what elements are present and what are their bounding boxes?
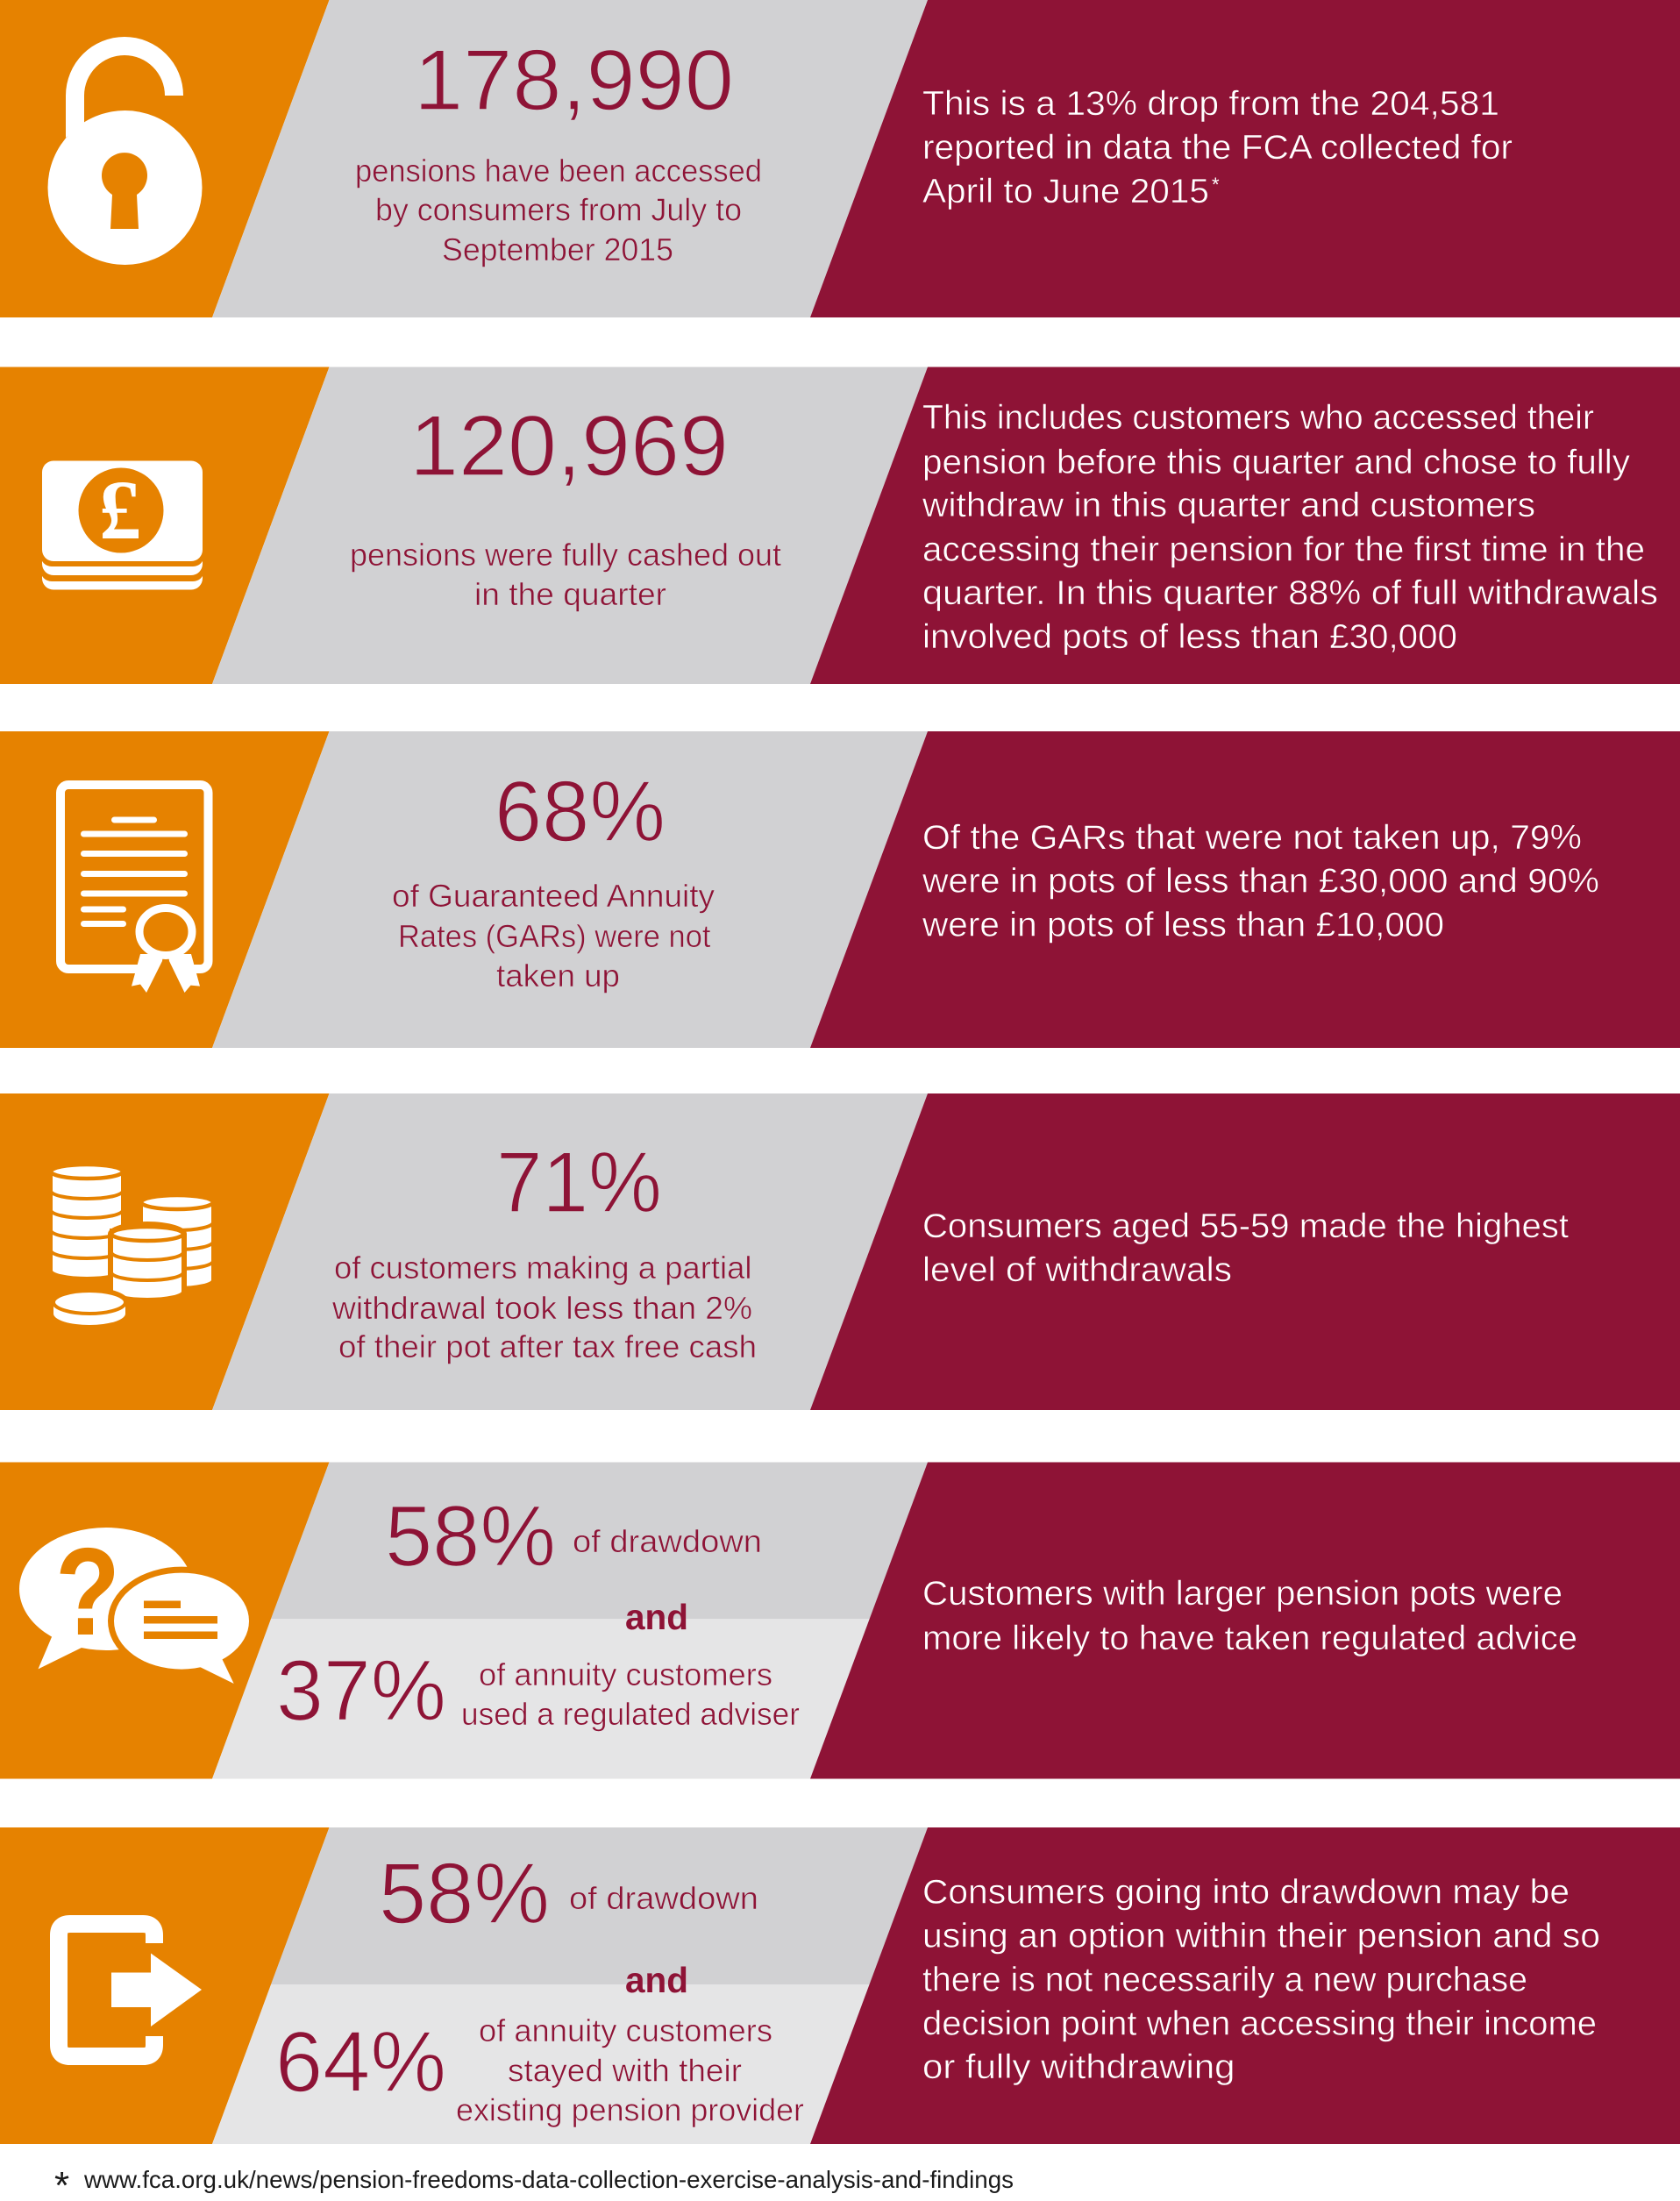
note text: April to June 2015 [922,173,1209,210]
maroon note panel [810,1827,1680,2144]
row 5: regulated advice [0,1463,1680,1778]
note text: were in pots of less than £30,000 and 90% [922,863,1599,900]
note text: This includes customers who accessed their [922,399,1594,437]
maroon note panel [810,1093,1680,1410]
note text: Customers with larger pension pots were [922,1575,1563,1613]
note text: This is a 13% drop from the 204,581 [922,85,1499,123]
maroon note panel [810,1463,1680,1778]
icon: certificate with rosette [61,785,209,993]
row 4: partial withdrawals [0,1093,1680,1410]
stat description: pensions were fully cashed out [350,537,781,573]
big number 64%: 64% [275,2013,446,2110]
note text: quarter. In this quarter 88% of full withdrawals [922,574,1658,612]
orange icon panel [0,1463,330,1778]
orange icon panel [0,1093,330,1410]
maroon note panel [810,0,1680,317]
note text: Of the GARs that were not taken up, 79% [922,819,1582,857]
stat description: of Guaranteed Annuity [392,878,715,914]
maroon note panel [810,367,1680,684]
stat description: by consumers from July to [375,191,742,228]
stat description: stayed with their [508,2052,742,2089]
upper grey stat panel [271,1463,928,1619]
note text: more likely to have taken regulated advice [922,1620,1577,1657]
big number 120,969: 120,969 [409,397,729,494]
stat description: of annuity customers [479,2012,772,2048]
stat description [355,153,762,267]
stat description: September 2015 [442,231,673,267]
row 3: guaranteed annuity rates [0,731,1680,1048]
stat description: existing pension provider [456,2092,804,2127]
stat description: Rates (GARs) were not [398,918,710,954]
note text [922,85,1513,210]
icon: open padlock [47,37,202,265]
icon: stack of pound notes [40,461,204,589]
row 1: pensions accessed [0,0,1680,317]
row 6: staying with provider [0,1827,1680,2144]
label: and: and [625,1597,688,1637]
label: of drawdown: of drawdown [569,1880,758,1916]
note text: * [1212,174,1220,196]
icon: exit door arrow [59,1924,202,2056]
stat description: of their pot after tax free cash [338,1328,757,1364]
icon: stacks of coins [49,1165,213,1325]
note text [922,1207,1569,1289]
note text: accessing their pension for the first time in the [922,531,1645,568]
stat description: of annuity customers [479,1656,772,1692]
stat description: used a regulated adviser [461,1696,800,1732]
note text: decision point when accessing their income [922,2005,1597,2043]
stat description: taken up [496,958,620,994]
note text: level of withdrawals [922,1251,1232,1289]
stat description: of customers making a partial [334,1250,752,1286]
note text: involved pots of less than £30,000 [922,618,1457,656]
note text: Consumers going into drawdown may be [922,1873,1570,1912]
upper grey stat panel [271,1827,928,1984]
label: and: and [625,1960,688,2000]
big number 178,990: 178,990 [414,32,734,128]
stat description [456,2012,804,2127]
stat description: withdrawal took less than 2% [331,1290,752,1326]
stat description: pensions have been accessed [355,153,762,189]
note text: using an option within their pension and so [922,1917,1600,1955]
stat description [350,537,781,612]
grey stat panel [212,0,928,317]
note text: pension before this quarter and chose to fully [922,444,1631,481]
stat description: in the quarter [474,576,666,612]
note text [922,819,1599,944]
grey stat panel [212,1093,928,1410]
maroon note panel [810,731,1680,1048]
orange icon panel [0,731,330,1048]
note text: Consumers aged 55-59 made the highest [922,1207,1569,1245]
grey stat panel [212,731,928,1048]
lower light stat panel [212,1619,870,1778]
big number 71%: 71% [496,1134,662,1230]
big number 37%: 37% [276,1642,446,1739]
big number 68%: 68% [495,763,666,859]
orange icon panel [0,0,330,317]
footnote source link: www.fca.org.uk/news/pension-freedoms-data-collection-exercise-analysis-and-findings [83,2166,1014,2193]
icon: chat speech bubbles: ? [55,1522,120,1662]
lower light stat panel [212,1984,870,2144]
note text: reported in data the FCA collected for [922,129,1513,167]
note text [922,1575,1577,1657]
note text: there is not necessarily a new purchase [922,1961,1527,1999]
note text [922,399,1658,656]
note text: were in pots of less than £10,000 [922,907,1444,944]
big number 58%: 58% [385,1487,556,1584]
orange icon panel [0,1827,330,2144]
note text [922,1873,1600,2086]
note text: or fully withdrawing [922,2048,1235,2086]
icon: chat speech bubbles [19,1522,255,1684]
label: of drawdown: of drawdown [573,1523,762,1559]
icon: stack of pound notes: £ [99,463,141,557]
stat description [392,878,715,994]
note text: withdraw in this quarter and customers [922,487,1535,524]
orange icon panel [0,367,330,684]
stat description [461,1656,800,1732]
grey stat panel [212,367,928,684]
row 2: pensions cashed out [0,367,1680,684]
stat description [331,1250,757,1364]
big number 58%: 58% [379,1845,550,1941]
